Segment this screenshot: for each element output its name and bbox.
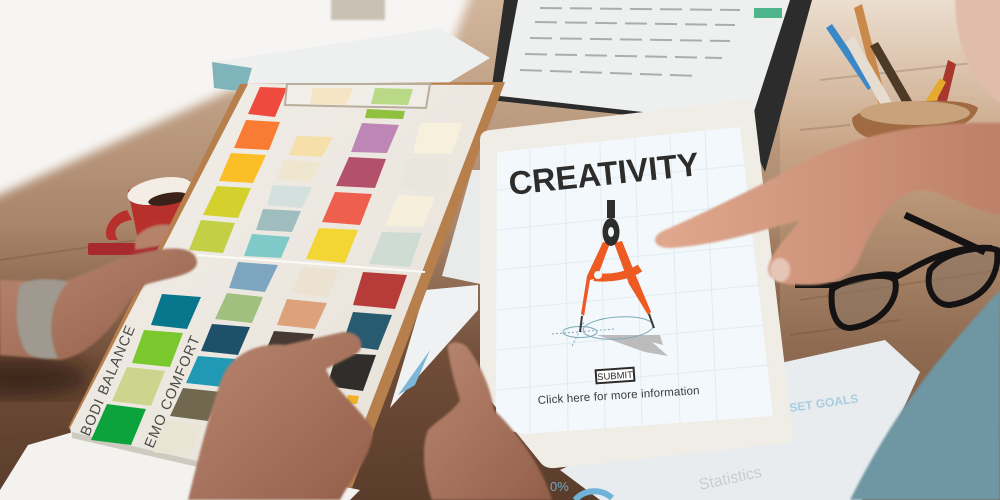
submit button: SUBMIT (597, 370, 634, 383)
more information text: Click here for more information (537, 385, 700, 407)
papers bottom right (550, 340, 920, 500)
heading: CREATIVITY (507, 145, 701, 202)
laptop (490, 0, 812, 172)
swatches column 1 (91, 87, 287, 445)
white sheet under clipboard (0, 285, 478, 500)
swatches column 4 (327, 123, 462, 404)
compass head (607, 200, 615, 218)
graph grid (497, 131, 770, 432)
pencil cup with pencils (826, 4, 978, 142)
blurred object at top (331, 0, 385, 20)
tablet body (480, 100, 793, 468)
label: emo comfort: EMO COMFORT (142, 333, 204, 451)
glasses (795, 215, 997, 328)
book behind clipboard (212, 28, 490, 92)
crossbar arc (594, 268, 640, 278)
needles (580, 314, 654, 332)
compass icon (552, 200, 668, 356)
left hand holding clipboard (0, 224, 197, 360)
swatches column 3 (262, 88, 413, 365)
white sheet beside tablet (442, 170, 485, 285)
pointing hand on color chart (188, 332, 373, 500)
swatches column 2 (153, 88, 353, 457)
blurred arm top right (955, 0, 1000, 105)
clipboard wooden board (68, 82, 505, 488)
compass legs (581, 242, 610, 316)
label: bodi balance: BODI BALANCE (78, 323, 139, 439)
tablet screen (496, 127, 773, 434)
color chart paper (70, 84, 494, 475)
red mug (106, 172, 195, 240)
fold line (197, 255, 425, 272)
red pencil (88, 243, 173, 255)
papers bottom right: SET GOALS (788, 391, 859, 415)
drawn ellipses (552, 315, 654, 346)
pointing hand on tablet (655, 123, 1000, 285)
tablet (480, 100, 793, 468)
wristwatch (17, 279, 68, 359)
compass shadow (597, 335, 668, 356)
papers bottom right: 0% (550, 479, 569, 494)
hand holding tablet (424, 342, 552, 500)
blurred white background top left (0, 0, 480, 208)
metal clip (285, 84, 430, 108)
papers bottom right: Statistics (697, 464, 763, 494)
clipboard (68, 82, 505, 488)
blue shirt (850, 290, 1000, 500)
